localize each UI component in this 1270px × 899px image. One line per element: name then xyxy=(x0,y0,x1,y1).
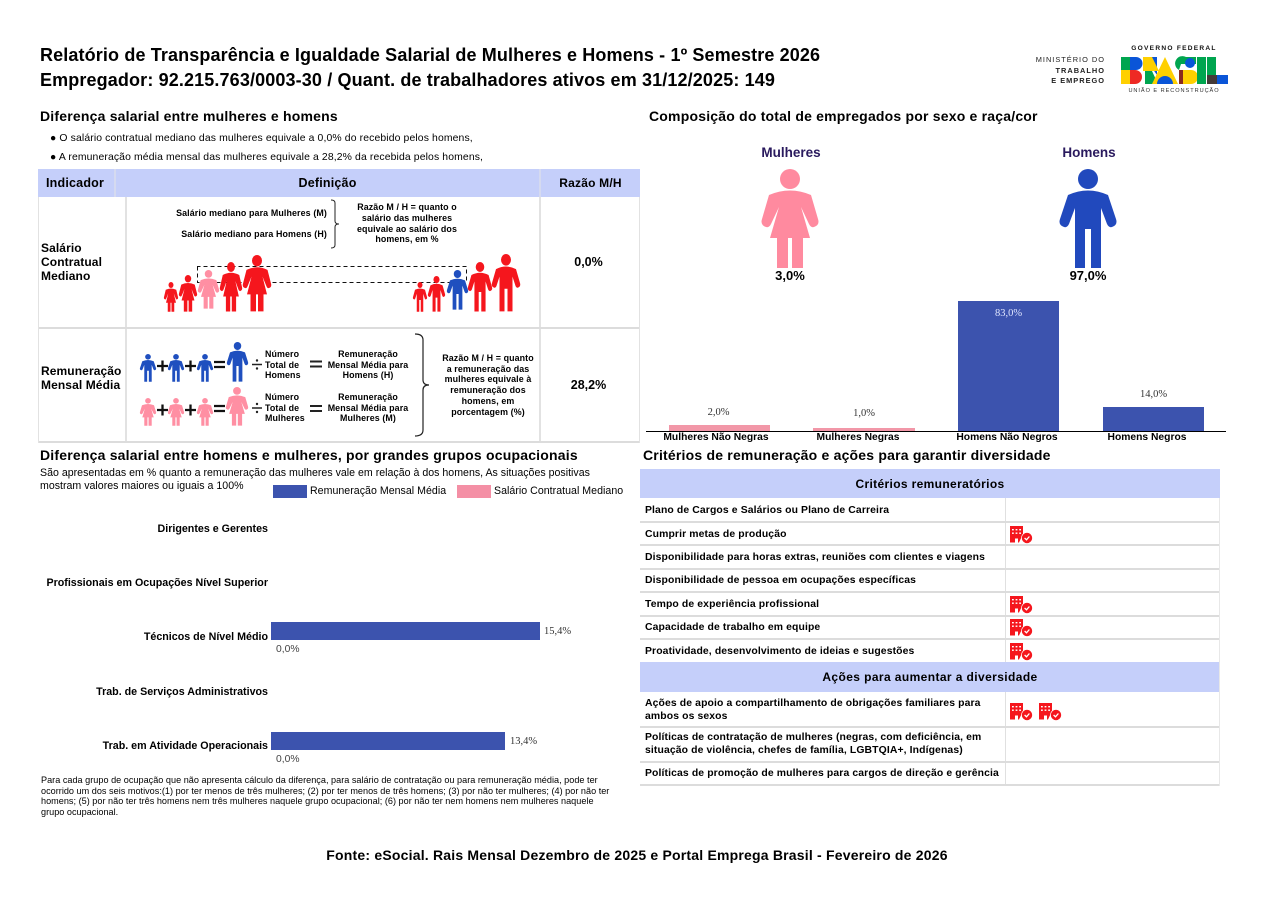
text: número total de homens: Homens xyxy=(265,370,301,380)
row: equipe: Capacidade de trabalho em equipe xyxy=(645,622,820,633)
value: 3,0%: 3,0% xyxy=(775,268,805,283)
text: remuneração mulheres: Remuneração xyxy=(338,392,398,402)
logo: governo federal brasil xyxy=(1121,45,1228,94)
row: proatividade: Proatividade, desenvolvimento de ideias e sugestões xyxy=(645,646,914,657)
text: remuneração homens: Mensal Média para xyxy=(328,360,408,370)
title: Relatório de Transparência e Igualdade Salarial de Mulheres e Homens - 1º Semestre 2026 xyxy=(40,45,820,65)
text: razão M/H remuneração: Razão M / H = quanto xyxy=(442,353,534,363)
icon: chave remuneração xyxy=(415,333,429,437)
text: razão M/H salário: homens, em % xyxy=(375,234,439,244)
text block: explicação: mostram valores maiores ou iguais a 100% xyxy=(40,480,244,492)
fonte: Fonte: eSocial. Rais Mensal Dezembro de 2025 e Portal Emprega Brasil - Fevereiro de 2026 xyxy=(326,847,948,863)
row label: remuneração mensal média: Remuneração xyxy=(41,364,121,378)
text block: bullets: ● A remuneração média mensal das mulheres equivale a 28,2% da recebida pelos homens, xyxy=(50,152,483,162)
panel: critérios de remuneração: Critérios remuneratórios xyxy=(855,477,1005,491)
header: definição: Definição xyxy=(298,176,357,190)
icon: empresa equipe xyxy=(1010,619,1032,636)
diagram: salário mediano labels: Salário mediano para Homens (H) xyxy=(181,229,327,239)
heading: diferença salarial: Diferença salarial entre mulheres e homens xyxy=(40,108,338,124)
bar: operacionais xyxy=(271,732,505,750)
label: homens negros: Homens Negros xyxy=(1108,432,1186,443)
row: metas: Cumprir metas de produção xyxy=(645,529,787,540)
row label: salário contratual mediano: Contratual xyxy=(41,255,102,269)
row: compartilhamento: Ações de apoio a compartilhamento de obrigações familiares para xyxy=(645,698,981,709)
heading: composição: Composição do total de empregados por sexo e raça/cor xyxy=(649,108,1038,124)
diagram: equação mulheres xyxy=(140,387,248,426)
text: razão M/H remuneração xyxy=(442,353,534,417)
text: razão M/H remuneração: homens, em xyxy=(462,396,514,406)
diagram: linha mediana tracejada xyxy=(197,266,467,283)
text: número total de mulheres: Mulheres xyxy=(265,413,305,423)
label: mulheres não negras: Mulheres Não Negras xyxy=(663,432,769,443)
text: número total de homens: Número xyxy=(265,349,299,359)
heading: grupos ocupacionais: Diferença salarial entre homens e mulheres, por grandes grupos ocupacionais xyxy=(40,447,578,463)
diagram: salário mediano labels xyxy=(176,208,327,239)
text: remuneração mulheres: Mulheres (M) xyxy=(340,413,396,423)
value: 2,0%: 2,0% xyxy=(708,407,729,418)
text: remuneração homens: Remuneração xyxy=(338,349,398,359)
icon: mulher xyxy=(762,169,818,268)
logo: governo federal brasil: GOVERNO FEDERAL xyxy=(1131,45,1217,52)
value: 13,4%: 13,4% xyxy=(510,736,537,747)
text: remuneração homens xyxy=(328,349,408,380)
header: ações xyxy=(640,662,1220,692)
row: compartilhamento xyxy=(645,698,981,722)
icon: homem xyxy=(1060,169,1116,268)
row label: salário contratual mediano xyxy=(41,241,102,283)
legend: Salário Contratual Mediano xyxy=(494,485,623,497)
text: número total de mulheres: Número xyxy=(265,392,299,402)
icon: chave salário mediano xyxy=(331,200,339,248)
row: compartilhamento: ambos os sexos xyxy=(645,710,728,722)
panel: critérios de remuneração xyxy=(640,469,1220,786)
bar: técnicos xyxy=(271,622,540,640)
bar: mulheres não negras xyxy=(669,425,770,430)
row: contratação xyxy=(645,732,981,756)
row: ocupações específicas: Disponibilidade de pessoa em ocupações específicas xyxy=(645,575,916,586)
table header xyxy=(38,169,640,197)
label: homens não negros: Homens Não Negros xyxy=(956,432,1058,443)
row: horas extras: Disponibilidade para horas extras, reuniões com clientes e viagens xyxy=(645,552,985,563)
text: razão M/H salário: salário das mulheres xyxy=(362,213,452,223)
bar: mulheres negras xyxy=(813,428,915,430)
label: profissionais: Profissionais em Ocupações Nível Superior xyxy=(46,577,268,589)
text: razão M/H remuneração: a remuneração das xyxy=(447,364,529,374)
value: 15,4%: 15,4% xyxy=(544,626,571,637)
logo: ministério do trabalho e emprego: MINISTÉRIO DO xyxy=(1036,55,1105,64)
text block: nota de rodapé: grupo ocupacional. xyxy=(41,807,118,817)
icon group: homens mediana xyxy=(412,254,520,312)
diagram: equação homens xyxy=(140,342,248,382)
text: razão M/H remuneração: remuneração dos xyxy=(450,385,526,395)
row label: remuneração mensal média: Mensal Média xyxy=(41,378,120,392)
text: número total de mulheres xyxy=(265,392,305,423)
row: experiência: Tempo de experiência profissional xyxy=(645,599,819,610)
legend xyxy=(273,485,623,498)
text: número total de mulheres: Total de xyxy=(265,403,299,413)
row label: salário contratual mediano: Mediano xyxy=(41,269,90,283)
text: razão M/H salário: equivale ao salário dos xyxy=(357,224,457,234)
title xyxy=(40,45,820,90)
text block: nota de rodapé: Para cada grupo de ocupação que não apresenta cálculo da diferença, para salário de contratação ou para remuneração média, pode ter xyxy=(41,775,598,785)
bar: homens negros xyxy=(1103,407,1204,430)
text block: nota de rodapé: ocorrido um dos seis motivos:(1) por ter menos de três mulheres; (2) por ter menos de três homens; (3) por não ter mulheres; (4) por não ter xyxy=(41,786,609,796)
heading: critérios: Critérios de remuneração e ações para garantir diversidade xyxy=(643,447,1051,463)
label: dirigentes: Dirigentes e Gerentes xyxy=(158,523,268,535)
text: razão M/H remuneração: porcentagem (%) xyxy=(451,407,525,417)
value: 0,0%: 0,0% xyxy=(574,255,603,269)
icon: empresa experiência xyxy=(1010,596,1032,614)
text: remuneração mulheres xyxy=(328,392,408,423)
icon: divisão e igual xyxy=(252,359,322,414)
legend: Remuneração Mensal Média xyxy=(310,485,446,497)
header: razão: Razão M/H xyxy=(559,176,622,190)
icon: empresa compartilhamento 2 xyxy=(1039,703,1062,720)
label: mulheres: Mulheres xyxy=(761,145,821,160)
value: 1,0%: 1,0% xyxy=(853,408,875,419)
label: operacionais: Trab. em Atividade Operacionais xyxy=(103,740,268,752)
text: remuneração homens: Homens (H) xyxy=(343,370,393,380)
value: 97,0%: 97,0% xyxy=(1070,268,1106,283)
header: indicador: Indicador xyxy=(46,176,104,190)
logo: ministério do trabalho e emprego: E EMPREGO xyxy=(1051,76,1105,85)
text: razão M/H remuneração: mulheres equivale à xyxy=(445,374,531,384)
row: contratação: Políticas de contratação de mulheres (negras, com deficiência, em xyxy=(645,732,981,743)
bar chart: grupos ocupacionais xyxy=(46,523,571,765)
label: mulheres negras: Mulheres Negras xyxy=(816,432,899,443)
value: 0,0% operacionais: 0,0% xyxy=(276,754,299,765)
bar chart: composição xyxy=(646,301,1226,443)
text: número total de homens: Total de xyxy=(265,360,299,370)
icon group: mulheres mediana xyxy=(164,255,272,312)
value: 28,2%: 28,2% xyxy=(571,378,606,392)
text: número total de homens xyxy=(265,349,301,380)
label: técnicos: Técnicos de Nível Médio xyxy=(144,631,268,643)
text: razão M/H salário: Razão M / H = quanto o xyxy=(357,202,457,212)
diagram: salário mediano labels: Salário mediano para Mulheres (M) xyxy=(176,208,327,218)
panel: critérios de remuneração: Ações para aumentar a diversidade xyxy=(822,670,1038,684)
text block: bullets xyxy=(50,133,483,162)
logo: ministério do trabalho e emprego xyxy=(1036,55,1105,85)
row: contratação: situação de violência, chefes de família, LGBTQIA+, Indígenas) xyxy=(645,745,963,756)
value: 0,0% técnicos: 0,0% xyxy=(276,644,299,655)
icon: empresa proatividade xyxy=(1010,643,1032,660)
label: homens: Homens xyxy=(1062,145,1116,160)
header: critérios remuneratórios xyxy=(640,469,1220,498)
text block: nota de rodapé xyxy=(41,775,610,817)
text block: nota de rodapé: homens; (5) por não ter três homens nem três mulheres naquele grupo ocupacional; (6) por não ter nem homens nem mulheres naquele xyxy=(41,796,594,806)
text block: explicação: São apresentadas em % quanto a remuneração das mulheres vale em relação à dos homens, As situações positivas xyxy=(40,467,590,479)
row: promoção: Políticas de promoção de mulheres para cargos de direção e gerência xyxy=(645,768,999,779)
row label: remuneração mensal média xyxy=(41,364,121,392)
row: plano de cargos: Plano de Cargos e Salários ou Plano de Carreira xyxy=(645,505,889,516)
text: razão M/H salário xyxy=(357,202,457,244)
row label: salário contratual mediano: Salário xyxy=(41,241,82,255)
value: 14,0%: 14,0% xyxy=(1140,389,1167,400)
logo: governo federal brasil: UNIÃO E RECONSTRUÇÃO xyxy=(1128,88,1220,94)
icon: empresa compartilhamento 1 xyxy=(1010,703,1032,720)
text block: bullets: ● O salário contratual mediano das mulheres equivale a 0,0% do recebido pelos homens, xyxy=(50,133,473,144)
icon: empresa metas xyxy=(1010,526,1032,544)
panel: tabela indicadores xyxy=(38,169,640,443)
title: Empregador: 92.215.763/0003-30 / Quant. de trabalhadores ativos em 31/12/2025: 149 xyxy=(40,70,775,90)
text block: explicação xyxy=(40,467,590,492)
label: administrativos: Trab. de Serviços Administrativos xyxy=(96,686,268,698)
text: remuneração mulheres: Mensal Média para xyxy=(328,403,408,413)
bar: homens não negros xyxy=(958,301,1059,430)
logo: ministério do trabalho e emprego: TRABALHO xyxy=(1056,66,1105,74)
value: 83,0%: 83,0% xyxy=(995,308,1022,319)
